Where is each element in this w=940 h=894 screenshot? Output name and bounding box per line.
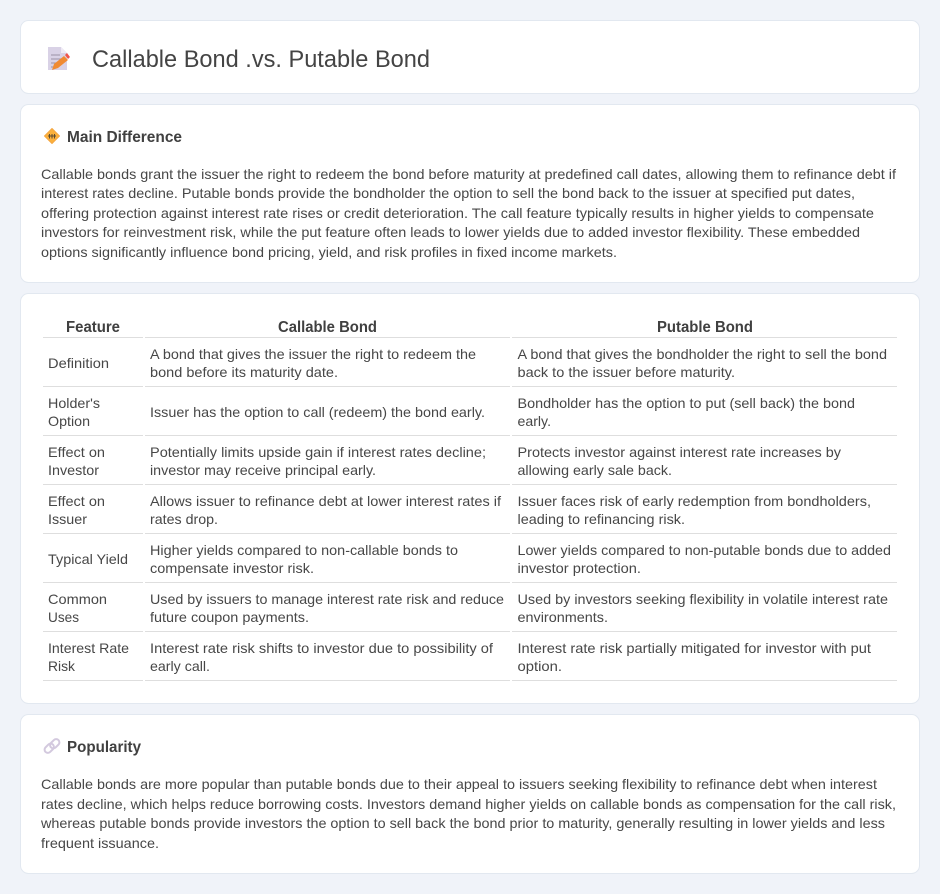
row: interest rate risk: Interest rate risk shifts to investor due to possibility of: [150, 640, 493, 656]
text block: popularity: whereas putable bonds provide investors the option to sell back the bond prior to maturity, generally resulting in lower yields and less: [40, 815, 885, 831]
text block: main difference: investors for reinvestment risk, while the put feature often leads to lower yields due to added investor flexibility. These embedded: [41, 224, 860, 240]
row: interest rate risk: early call.: [150, 658, 210, 674]
row: interest rate risk: option.: [518, 658, 562, 674]
panel: popularity: [20, 714, 920, 874]
row: typical yield: Higher yields compared to non-callable bonds to: [150, 542, 458, 558]
row: typical yield: Lower yields compared to non-putable bonds due to added: [518, 542, 891, 558]
row: interest rate risk: Risk: [48, 658, 76, 674]
row: effect on investor: Effect on: [48, 444, 105, 460]
row: typical yield: compensate investor risk.: [150, 560, 314, 576]
row: interest rate risk: Interest rate risk partially mitigated for investor with put: [518, 640, 871, 656]
text block: main difference: offering protection against interest rate rises or credit deterioration. The call feature typically results in higher yields to compensate: [41, 205, 874, 221]
row: effect on issuer: rates drop.: [150, 511, 218, 527]
row: holder's option: [48, 395, 855, 429]
row: interest rate risk: Interest Rate: [48, 640, 129, 656]
row: definition: bond before its maturity date.: [150, 364, 338, 380]
panel: main difference: [20, 104, 920, 282]
icon: document with pencil: [48, 47, 70, 70]
row: common uses: Used by issuers to manage interest rate risk and reduce: [150, 591, 504, 607]
row: holder's option: Bondholder has the option to put (sell back) the bond: [518, 395, 855, 411]
row: common uses: [48, 591, 888, 625]
heading: popularity: Popularity: [67, 739, 141, 756]
row: holder's option: early.: [518, 413, 551, 429]
row: definition: [48, 346, 887, 380]
row: effect on issuer: Allows issuer to refinance debt at lower interest rates if: [150, 493, 501, 509]
text block: popularity: Callable bonds are more popular than putable bonds due to their appeal to issuers seeking flexibility to refinance debt when interest: [41, 776, 877, 792]
row: common uses: Common: [48, 591, 107, 607]
row: effect on investor: Protects investor against interest rate increases by: [518, 444, 841, 460]
row: holder's option: Option: [48, 413, 90, 429]
row: effect on issuer: Issuer: [48, 511, 87, 527]
panel: title header: [20, 20, 920, 94]
row: effect on investor: Potentially limits upside gain if interest rates decline;: [150, 444, 486, 460]
row: effect on investor: allowing early sale back.: [518, 462, 672, 478]
text block: popularity: [40, 776, 896, 851]
row: effect on issuer: leading to refinancing risk.: [518, 511, 685, 527]
row: interest rate risk: [48, 640, 871, 674]
row: effect on issuer: Issuer faces risk of early redemption from bondholders,: [518, 493, 871, 509]
table header row: Callable Bond: [278, 319, 377, 336]
table header row: Putable Bond: [657, 319, 753, 336]
text block: main difference: interest rates decline. Putable bonds provide the bondholder the option to sell the bond back to the issuer at specified put dates,: [41, 185, 855, 201]
row: common uses: Uses: [48, 609, 79, 625]
text block: popularity: frequent issuance.: [41, 835, 159, 851]
row: definition: A bond that gives the bondholder the right to sell the bond: [518, 346, 887, 362]
text block: popularity: rates decline, which helps reduce borrowing costs. Investors demand higher yields on callable bonds as compensation for the call risk,: [41, 796, 896, 812]
row: holder's option: Issuer has the option to call (redeem) the bond early.: [150, 404, 485, 420]
row: holder's option: Holder's: [48, 395, 100, 411]
text block: main difference: Callable bonds grant the issuer the right to redeem the bond before maturity at predefined call dates, allowing them to refinance debt if: [41, 166, 896, 182]
row: effect on investor: investor may receive principal early.: [150, 462, 376, 478]
text block: main difference: [41, 166, 896, 260]
panel: comparison table: [20, 294, 920, 704]
table header row: [66, 319, 753, 336]
heading: main difference: Main Difference: [67, 129, 182, 146]
row: definition: back to the issuer before maturity.: [518, 364, 735, 380]
row: common uses: Used by investors seeking flexibility in volatile interest rate: [518, 591, 888, 607]
row: effect on investor: Investor: [48, 462, 99, 478]
icon: chain link: [43, 738, 61, 754]
title: Callable Bond .vs. Putable Bond: [92, 46, 430, 73]
row: definition: A bond that gives the issuer the right to redeem the: [150, 346, 476, 362]
row: typical yield: [48, 542, 891, 576]
text block: main difference: options significantly influence bond pricing, yield, and risk profiles in fixed income markets.: [41, 244, 617, 260]
row: common uses: environments.: [518, 609, 608, 625]
row: typical yield: Typical Yield: [48, 551, 128, 567]
row: effect on issuer: [48, 493, 871, 527]
icon: orange diamond: [44, 128, 60, 144]
row: effect on issuer: Effect on: [48, 493, 105, 509]
row: definition: Definition: [48, 355, 109, 371]
row: effect on investor: [48, 444, 841, 478]
row: typical yield: investor protection.: [518, 560, 641, 576]
table header row: Feature: [66, 319, 120, 336]
row: common uses: future coupon payments.: [150, 609, 309, 625]
